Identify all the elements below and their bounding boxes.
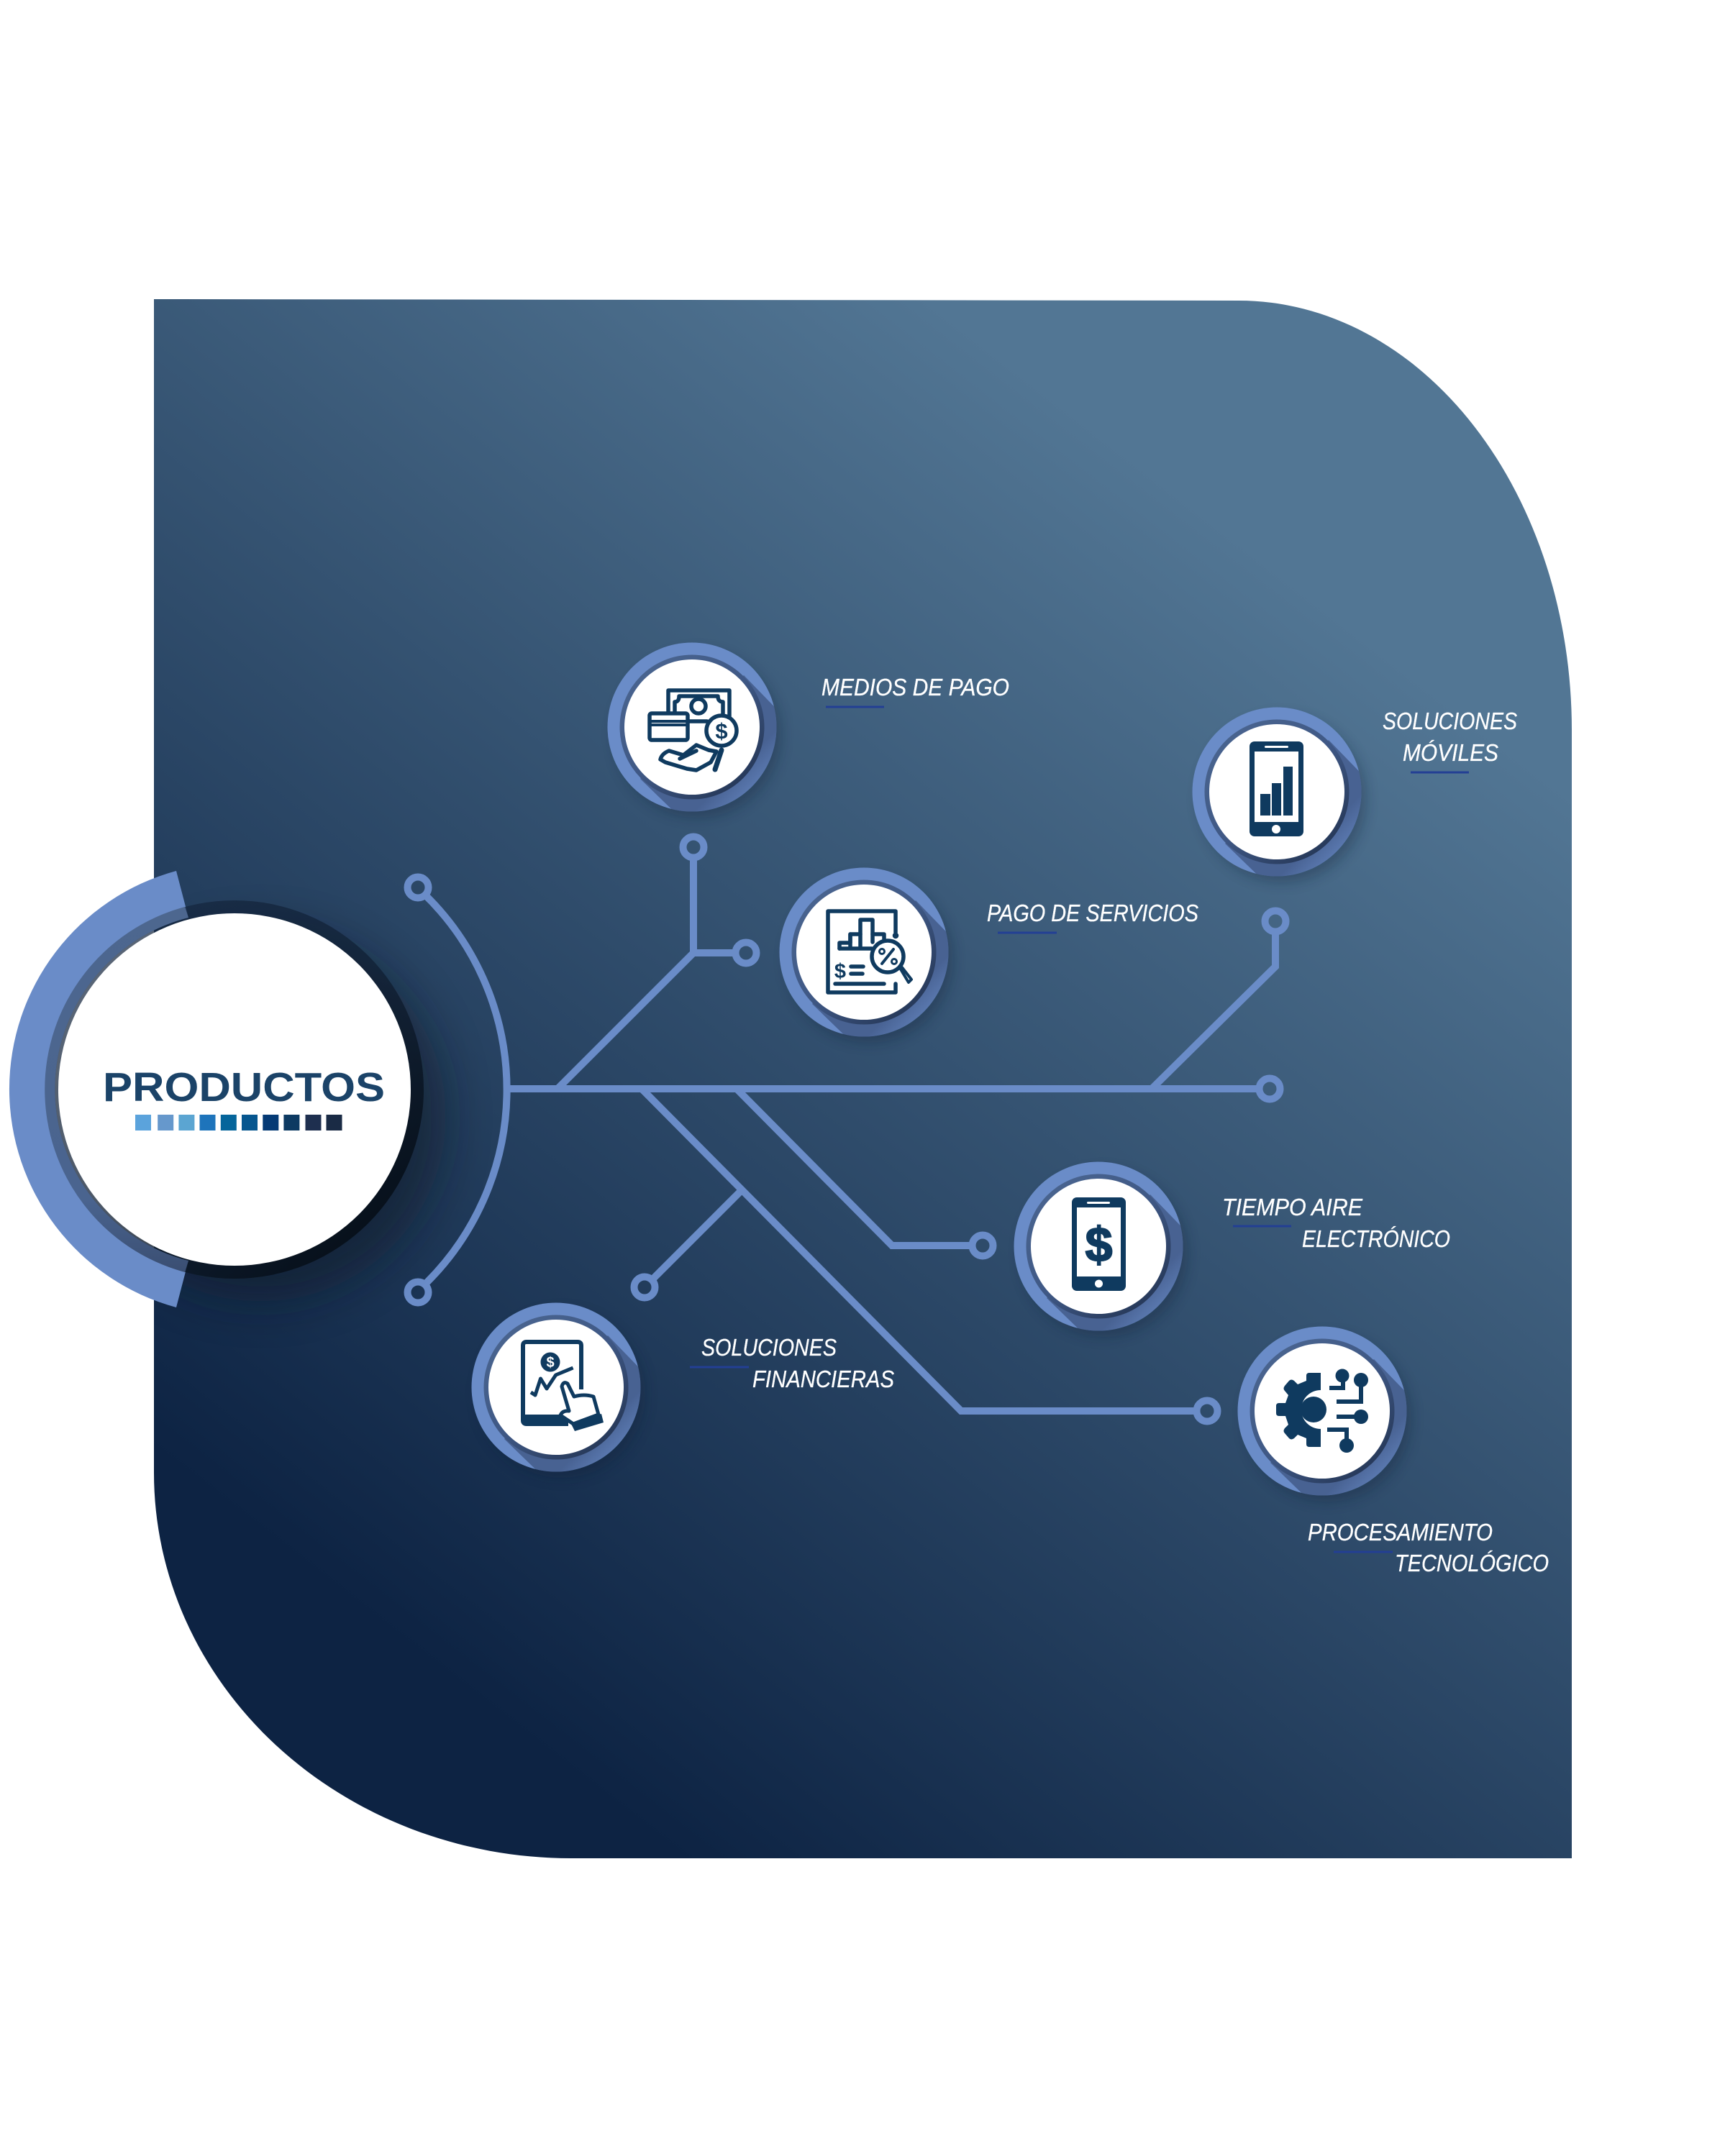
ring <box>607 643 836 871</box>
label: pago de servicios: PAGO DE SERVICIOS <box>987 900 1198 926</box>
heading: PRODUCTOS <box>103 1064 385 1110</box>
icon: phone with bar chart <box>1250 741 1303 836</box>
tablet <box>523 1342 581 1424</box>
cuff <box>571 1414 604 1431</box>
icon: tablet with chart and pointing hand <box>523 1342 604 1431</box>
branch to medios de pago and pago de servicios <box>557 857 735 1089</box>
main circle: productos <box>9 871 446 1307</box>
soluciones financieras item <box>472 1303 700 1531</box>
blue crescent arc <box>9 871 188 1307</box>
label: procesamiento tecnologico <box>1308 1519 1549 1576</box>
chart line <box>531 1368 573 1395</box>
label: soluciones moviles: MÓVILES <box>1403 739 1498 766</box>
trace nodes <box>1335 1369 1368 1453</box>
ring <box>1193 708 1421 936</box>
label: tiempo aire electronico: TIEMPO AIRE <box>1222 1194 1363 1220</box>
main circle soft shadow <box>181 936 458 1310</box>
label: soluciones financieras: FINANCIERAS <box>752 1366 894 1392</box>
branch to soluciones financieras <box>651 1191 741 1281</box>
icon: phone with dollar: $ <box>1085 1218 1112 1272</box>
ring <box>1237 1326 1466 1555</box>
background panel <box>154 299 1572 1858</box>
label: soluciones financieras: SOLUCIONES <box>701 1334 837 1361</box>
icon: phone with dollar <box>1072 1197 1126 1291</box>
procesamiento tecnologico item <box>1237 1326 1466 1555</box>
dark ring <box>45 900 424 1279</box>
label: tiempo aire electronico <box>1222 1194 1450 1252</box>
icon: money, card, coin and hand: $ <box>715 718 728 744</box>
branch to procesamiento tecnologico <box>642 1089 1196 1411</box>
ring <box>780 867 1008 1096</box>
connector arc around main circle <box>423 893 507 1286</box>
icon: money, card, coin and hand <box>650 690 737 770</box>
branch to tiempo aire electronico <box>737 1089 971 1246</box>
icon: half gear with circuit traces <box>1276 1369 1368 1453</box>
ring <box>472 1303 700 1531</box>
label: procesamiento tecnologico: TECNOLÓGICO <box>1395 1550 1549 1576</box>
branch to soluciones moviles <box>1152 932 1275 1089</box>
connector lines <box>407 837 1286 1421</box>
main horizontal line <box>507 1085 1259 1092</box>
icon: tablet with chart and pointing hand: $ <box>546 1355 555 1371</box>
label: procesamiento tecnologico: PROCESAMIENTO <box>1308 1519 1493 1545</box>
connector end nodes <box>407 837 1286 1421</box>
circuit traces <box>1327 1377 1361 1444</box>
soluciones moviles item <box>1193 708 1421 936</box>
white disc <box>58 913 411 1266</box>
coin <box>541 1352 560 1372</box>
label: soluciones moviles <box>1383 708 1517 774</box>
icon: report with magnifier <box>828 911 911 992</box>
hub <box>1301 1397 1326 1422</box>
label: soluciones financieras <box>690 1334 894 1392</box>
hand <box>560 1383 598 1424</box>
ring <box>1014 1162 1242 1390</box>
colour squares <box>135 1115 342 1130</box>
medios de pago item <box>607 643 836 871</box>
icon: report with magnifier: $ <box>834 960 846 983</box>
label: medios de pago: MEDIOS DE PAGO <box>821 674 1009 700</box>
half gear <box>1276 1373 1321 1447</box>
label: soluciones moviles: SOLUCIONES <box>1383 708 1517 734</box>
tiempo aire electronico item <box>1014 1162 1242 1390</box>
ring section over crescent <box>45 907 188 1272</box>
pago de servicios item <box>780 867 1008 1096</box>
label: tiempo aire electronico: ELECTRÓNICO <box>1302 1225 1450 1252</box>
